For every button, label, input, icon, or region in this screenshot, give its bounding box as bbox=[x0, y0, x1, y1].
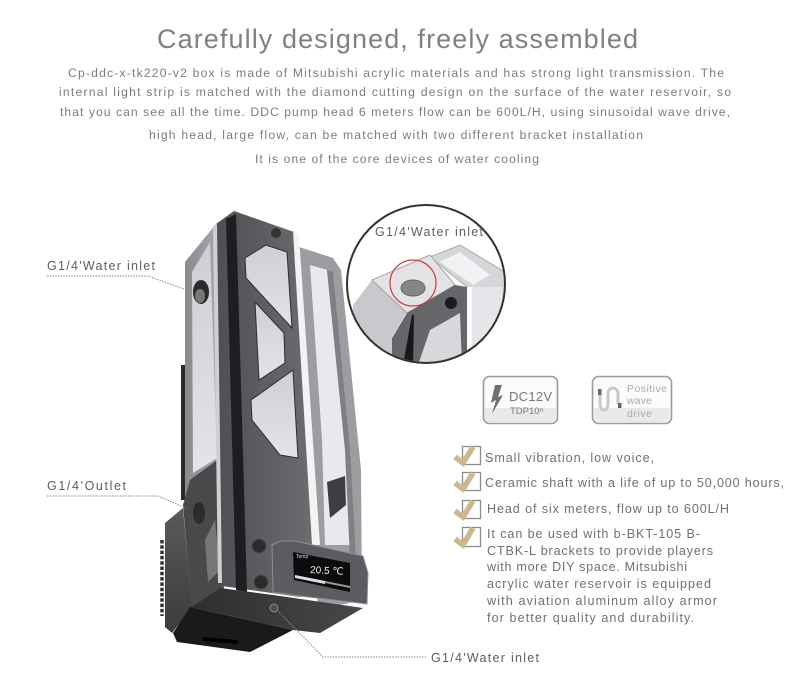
intro text block: Cp-ddc-x-tk220-v2 box is made of Mitsubishi acrylic materials and has strong light transmission. The bbox=[68, 66, 724, 80]
badge: DC12V: DC12V bbox=[509, 389, 552, 404]
black foot bbox=[173, 607, 293, 652]
leader: upper inlet bbox=[47, 276, 184, 289]
label: outlet: G1/4'Outlet bbox=[47, 479, 127, 493]
item 4: with more DIY space. Mitsubishi bbox=[486, 560, 687, 574]
inlet port bbox=[193, 280, 209, 304]
title: Carefully designed, freely assembled bbox=[157, 24, 638, 54]
frame window bbox=[418, 313, 462, 365]
item 4: acrylic water reservoir is equipped bbox=[487, 577, 711, 591]
checklist bbox=[455, 446, 784, 625]
label in circle: G1/4'Water inlet bbox=[375, 225, 484, 239]
dark frame bbox=[392, 285, 467, 365]
lower left acrylic bbox=[352, 280, 406, 354]
leader: outlet bbox=[47, 496, 186, 508]
item 2: Ceramic shaft with a life of up to 50,000 hours, bbox=[485, 476, 784, 490]
outlet port bbox=[193, 502, 205, 524]
intro text block: It is one of the core devices of water cooling bbox=[255, 152, 539, 166]
right acrylic block bbox=[432, 244, 504, 348]
intro text block: that you can see all the time. DDC pump head 6 meters flow can be 600L/H, using sinusoidal wave drive, bbox=[60, 105, 730, 119]
left acrylic panel bbox=[185, 224, 226, 590]
badge: positive wave drive bbox=[592, 376, 672, 424]
product: water tank and pump bbox=[162, 211, 368, 652]
rear black strip bbox=[181, 365, 189, 500]
intro text block: internal light strip is matched with the diamond cutting design on the surface of the water reservoir, so bbox=[59, 85, 731, 99]
badge: positive wave drive: Positive bbox=[627, 383, 667, 395]
detail circle bbox=[347, 205, 510, 365]
lightning icon bbox=[491, 385, 503, 414]
leader: lower inlet bbox=[277, 610, 426, 657]
bottom port bbox=[270, 604, 278, 612]
intro text block bbox=[59, 66, 731, 166]
item 1 bbox=[455, 446, 654, 465]
pump body bbox=[165, 508, 192, 633]
window 2 bbox=[255, 302, 285, 380]
item 4: CTBK-L brackets to provide players bbox=[487, 544, 713, 558]
badge: DC12V: TDP10ⁿ bbox=[510, 406, 543, 417]
wave icon bbox=[600, 388, 618, 410]
top screw bbox=[271, 228, 281, 238]
item 1: Small vibration, low voice, bbox=[485, 451, 654, 465]
badge: positive wave drive: drive bbox=[627, 408, 652, 420]
thread bbox=[401, 280, 425, 296]
intro text block: high head, large flow, can be matched with two different bracket installation bbox=[149, 128, 643, 142]
display screen: 20.5 ℃ bbox=[310, 565, 344, 578]
item 4: It can be used with b-BKT-105 B- bbox=[487, 527, 700, 541]
item 3: Head of six meters, flow up to 600L/H bbox=[487, 502, 729, 516]
black centre strip bbox=[226, 214, 247, 592]
item 4 bbox=[455, 527, 717, 625]
lower left dark section bbox=[183, 460, 224, 610]
white edge strip bbox=[293, 232, 320, 545]
black strip bbox=[404, 315, 414, 361]
display screen bbox=[293, 552, 350, 592]
display housing bbox=[272, 541, 368, 604]
front frame bbox=[216, 211, 320, 597]
red highlight ring bbox=[390, 260, 436, 306]
side hole bbox=[445, 297, 457, 309]
item 4: with aviation aluminum alloy armor bbox=[486, 594, 717, 608]
front screws bbox=[252, 539, 268, 589]
window 1 bbox=[245, 245, 292, 328]
base plate bbox=[190, 588, 363, 633]
white strip bbox=[467, 287, 472, 348]
silver edge strip bbox=[213, 224, 222, 583]
top acrylic lid bbox=[372, 255, 455, 313]
window 3 bbox=[251, 370, 298, 458]
display screen: Temp bbox=[296, 554, 308, 560]
label: lower inlet: G1/4'Water inlet bbox=[431, 651, 540, 665]
circle outline bbox=[347, 205, 505, 363]
right side panel bbox=[296, 246, 362, 610]
badge: DC12V bbox=[484, 376, 558, 424]
item 4: for better quality and durability. bbox=[487, 611, 694, 625]
pump fins bbox=[160, 540, 164, 616]
label: upper inlet: G1/4'Water inlet bbox=[47, 259, 156, 273]
item 3 bbox=[455, 500, 729, 518]
badge: positive wave drive: wave bbox=[626, 395, 652, 407]
